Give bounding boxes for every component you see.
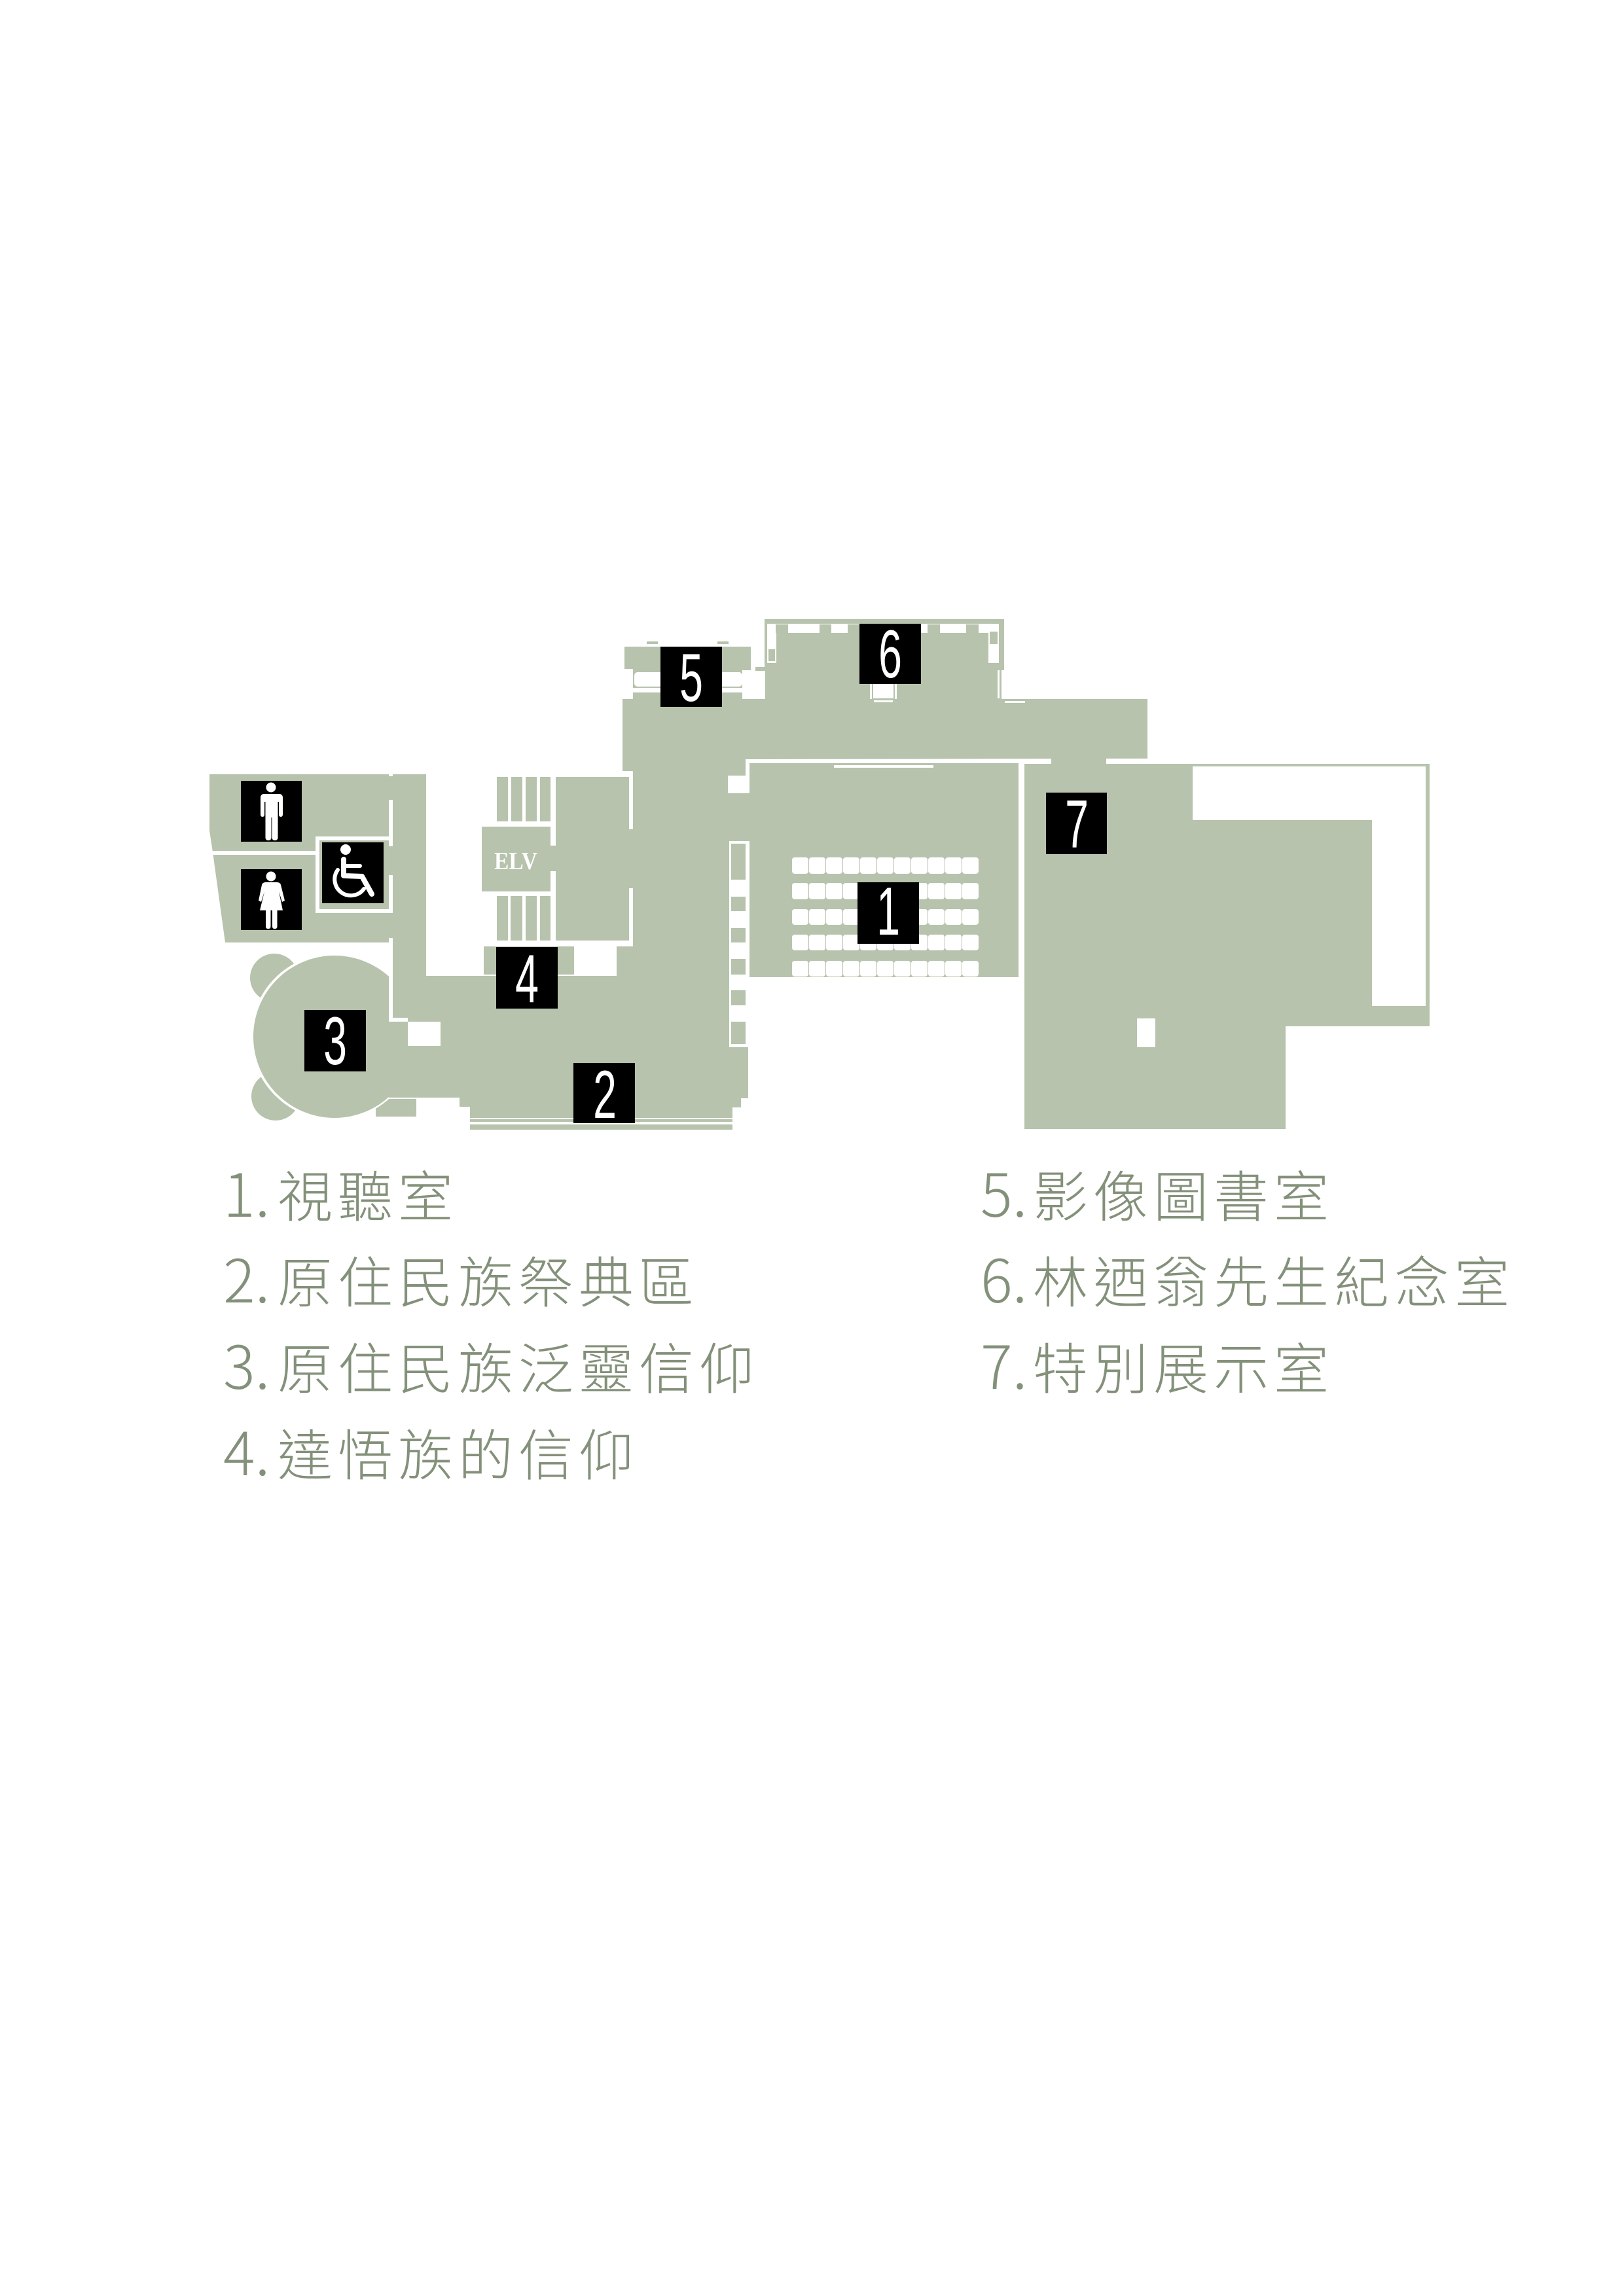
floor plan (209, 617, 1430, 1133)
marker 1: 1 (876, 874, 900, 950)
legend item 1: 1. (223, 1148, 270, 1234)
marker 2: 2 (593, 1057, 617, 1133)
marker 5 (660, 640, 722, 716)
seats (792, 857, 979, 977)
room 5 block (624, 641, 765, 688)
legend item 6: 林迺翁先生紀念室 (1033, 1253, 1515, 1314)
marker 1 (857, 874, 919, 950)
marker 6: 6 (878, 617, 902, 692)
left wing walls (213, 774, 441, 1046)
icon: women's toilet (241, 869, 302, 930)
legend: right column (981, 1148, 1515, 1407)
marker 6 (859, 617, 921, 692)
icon: accessible toilet (322, 842, 384, 903)
room 6 details (767, 624, 1025, 703)
legend item 4: 達悟族的信仰 (278, 1426, 639, 1487)
marker 2 (573, 1057, 635, 1133)
legend item 1: 視聽室 (278, 1167, 458, 1229)
window column (731, 844, 746, 1044)
legend item 5: 影像圖書室 (1033, 1167, 1334, 1229)
legend item 7: 7. (981, 1320, 1027, 1407)
legend item 4: 4. (223, 1407, 270, 1493)
marker 3 (304, 1003, 366, 1079)
room 3: round hall with lobes (250, 954, 417, 1121)
marker 7 (1046, 787, 1107, 863)
legend item 6: 6. (981, 1234, 1027, 1320)
lobby room beside elevator (556, 777, 633, 941)
legend item 3: 原住民族泛靈信仰 (278, 1339, 759, 1401)
main corridors and left wing (209, 619, 1147, 1118)
room 4 entrance block (484, 946, 574, 975)
legend item 5: 5. (981, 1148, 1027, 1234)
legend item 3: 3. (223, 1320, 270, 1407)
marker 5: 5 (679, 640, 703, 716)
marker 7: 7 (1065, 787, 1089, 863)
marker 4 (496, 941, 558, 1017)
elevator (482, 827, 556, 891)
legend: left column (223, 1148, 759, 1493)
icon: men's toilet (241, 781, 302, 842)
legend item 2: 原住民族祭典區 (278, 1253, 699, 1314)
legend item 2: 2. (223, 1234, 270, 1320)
legend item 7: 特別展示室 (1033, 1339, 1334, 1401)
elevator: ELV (494, 848, 537, 875)
marker 4: 4 (515, 941, 539, 1017)
bottom terrace strips (470, 1119, 732, 1130)
room 7: special exhibition (1024, 759, 1430, 1129)
marker 3: 3 (323, 1003, 347, 1079)
room 1: theatre (749, 763, 1019, 977)
stairs (497, 777, 550, 941)
